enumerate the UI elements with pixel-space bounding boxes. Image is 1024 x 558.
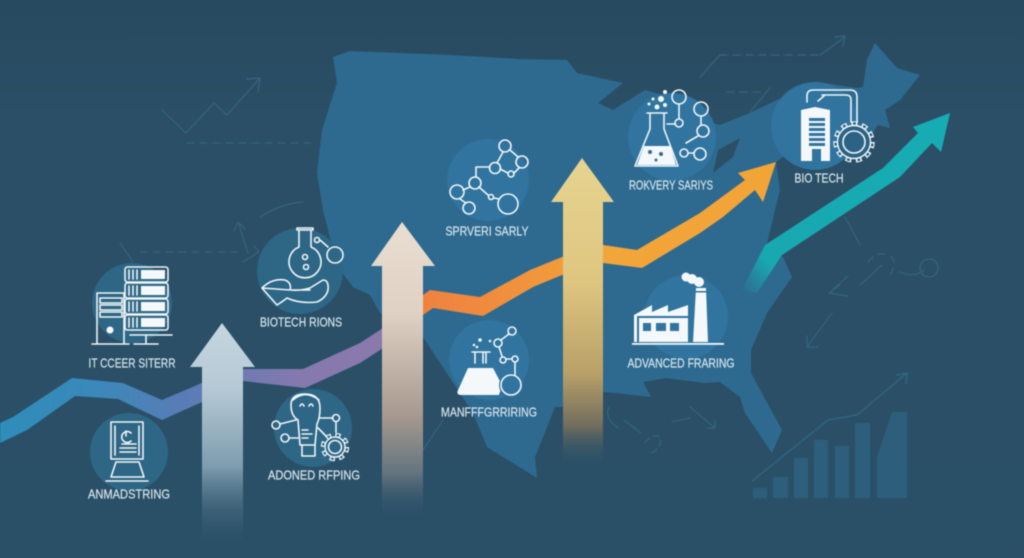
label: rokvery: ROKVERY SARIYS [629,178,713,192]
icon: network nodes [450,140,528,214]
icon: server racks [92,267,172,344]
great lakes [713,138,740,173]
panel: rokvery [628,90,716,192]
label: manufacturing: MANFFFGRRIRING [441,406,537,420]
growth arrow: blue to orange [0,162,776,443]
bar chart (background) [752,373,907,498]
background decoration: faint trend marks [120,36,938,453]
panel: IT center [88,263,176,370]
panel: adoned [268,389,360,482]
label: biotech: BIOTECH RIONS [260,316,342,330]
panel: bio tech [771,82,872,186]
panel: sprveri [446,139,529,238]
label: advanced: ADVANCED FRARING [628,356,734,370]
label: IT center: IT CCEER SITERR [88,356,176,370]
icon: flask with molecules [635,90,709,166]
label: sprveri: SPRVERI SARLY [446,224,529,238]
panel: biotech [257,228,343,330]
rising arrow 3 [551,158,614,466]
icon: factory [632,272,724,345]
panel: advanced [628,272,734,370]
rising arrow 2 [371,222,435,518]
icon: building with gear and pipes [801,90,872,161]
label: bio tech: BIO TECH [794,172,844,186]
label: anmadstring: ANMADSTRING [88,488,170,502]
icon: lab equipment [457,327,523,397]
label: adoned: ADONED RFPING [268,468,360,482]
icon: flask in hand [262,228,343,305]
map of the United States [317,43,920,478]
icon: document terminal [106,422,148,481]
rising arrow 1 [190,323,255,545]
growth arrow: teal [742,113,950,293]
icon: robot and gear [272,394,347,459]
panel: anmadstring [88,413,170,502]
panel: manufacturing [441,320,537,420]
